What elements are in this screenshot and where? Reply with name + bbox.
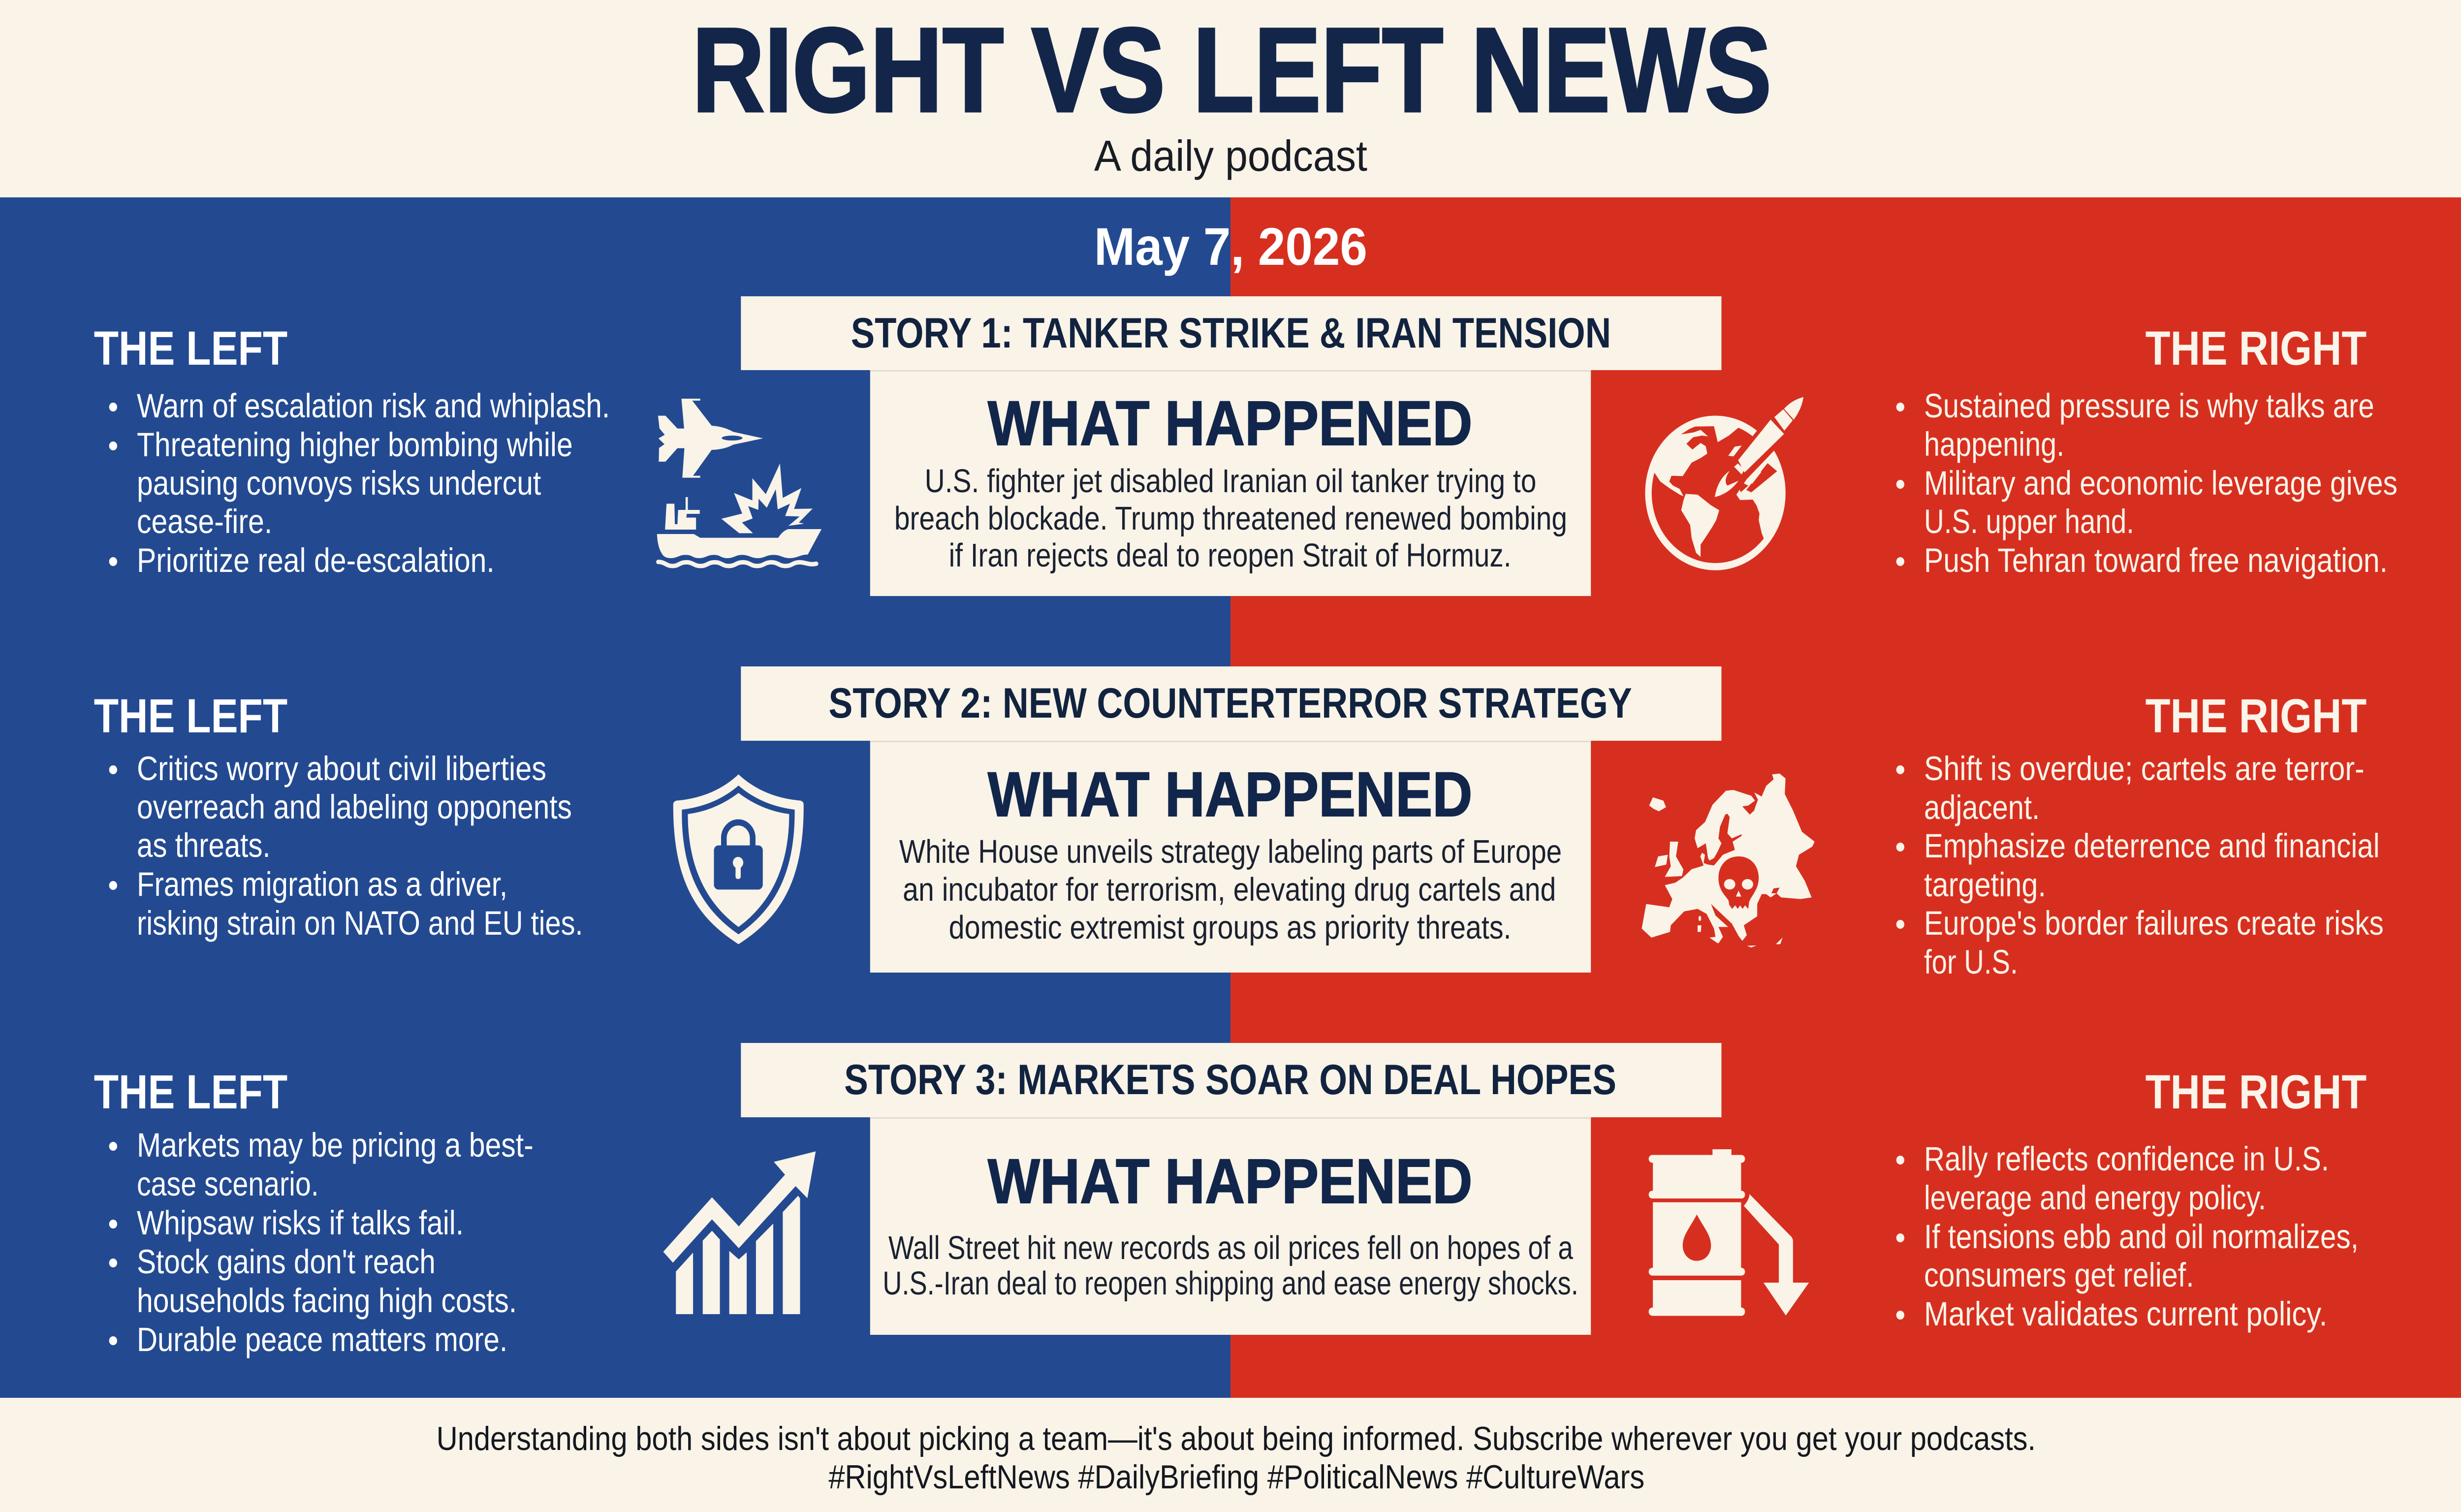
panel: story 3 centre [741,1043,1721,1335]
what happened text: breach blockade. Trump threatened renewed bombing [894,500,1567,537]
bullet list: for U.S. [1924,943,2018,981]
date: May 7, 2026 [1094,217,1367,276]
story 2 heading: STORY 2: NEW COUNTERTERROR STRATEGY [828,680,1632,727]
heading: THE RIGHT [2145,321,2366,375]
bullet list: Military and economic leverage gives [1924,464,2398,502]
bullet list: Critics worry about civil liberties [137,749,546,788]
heading: THE LEFT [94,321,287,375]
heading: THE RIGHT [2145,689,2366,743]
icon: rising market chart [663,1151,816,1314]
title: RIGHT VS LEFT NEWS [692,3,1771,137]
bullet list: consumers get relief. [1924,1256,2194,1294]
background band [0,197,2461,1398]
what happened text: U.S. fighter jet disabled Iranian oil tanker trying to [925,462,1536,500]
what happened text: Wall Street hit new records as oil prices fell on hopes of a [888,1229,1573,1266]
bullet list: Rally reflects confidence in U.S. [1924,1139,2329,1178]
bullet list: risking strain on NATO and EU ties. [137,904,583,942]
heading: THE RIGHT [2145,1065,2366,1119]
icon: globe and missile [1640,397,1803,570]
what happened text [894,462,1567,574]
bullet list: Whipsaw risks if talks fail. [137,1203,464,1242]
heading: THE LEFT [94,689,287,743]
what happened text: White House unveils strategy labeling parts of Europe [899,833,1562,870]
bullet list: Prioritize real de-escalation. [137,541,495,579]
what happened heading: WHAT HAPPENED [988,1146,1472,1216]
bullet list: If tensions ebb and oil normalizes, [1924,1217,2359,1256]
bullet list: U.S. upper hand. [1924,502,2134,540]
footer text [437,1419,2036,1496]
icon: shield with padlock [673,774,804,944]
icon: fighter jet and tanker explosion [657,399,821,566]
what happened text: U.S.-Iran deal to reopen shipping and ease energy shocks. [883,1264,1578,1302]
bullet list [1896,386,2398,579]
bullet list [109,1126,534,1358]
what happened text [883,1229,1578,1302]
bullet list [1896,1139,2359,1333]
bullet list: adjacent. [1924,788,2040,826]
bullet list: Durable peace matters more. [137,1320,507,1358]
bullet list: pausing convoys risks undercut [137,464,541,502]
icon: oil barrel with falling arrow [1649,1149,1809,1316]
heading: THE LEFT [94,1065,287,1119]
panel: the right, story 2 [1896,689,2384,981]
bullet list: households facing high costs. [137,1281,517,1320]
bullet list: happening. [1924,425,2064,463]
what happened heading: WHAT HAPPENED [988,759,1472,829]
panel: the left, story 1 [94,321,610,579]
panel: story 2 centre [741,666,1721,973]
what happened text: an incubator for terrorism, elevating drug cartels and [903,871,1556,908]
subtitle: A daily podcast [1094,131,1367,180]
panel: the left, story 2 [94,689,583,942]
bullet list: targeting. [1924,865,2046,904]
what happened text: if Iran rejects deal to reopen Strait of Hormuz. [949,536,1511,574]
what happened heading: WHAT HAPPENED [988,388,1472,458]
footer text: #RightVsLeftNews #DailyBriefing #PoliticalNews #CultureWars [828,1458,1644,1496]
bullet list: Emphasize deterrence and financial [1924,826,2380,865]
story 1 heading: STORY 1: TANKER STRIKE & IRAN TENSION [851,310,1611,357]
bullet list [1896,749,2384,981]
bullet list: Warn of escalation risk and whiplash. [137,386,610,425]
panel: the left, story 3 [94,1065,534,1358]
bullet list: Threatening higher bombing while [137,425,573,464]
footer text: Understanding both sides isn't about picking a team—it's about being informed. Subscribe wherever you get your podcasts. [437,1419,2036,1457]
bullet list: overreach and labeling opponents [137,788,572,826]
story 3 heading: STORY 3: MARKETS SOAR ON DEAL HOPES [844,1057,1616,1103]
what happened text [899,833,1562,946]
panel: the right, story 3 [1896,1065,2366,1333]
bullet list [109,386,610,579]
bullet list: cease-fire. [137,502,272,540]
bullet list: case scenario. [137,1165,319,1203]
icon: Europe map with skull [1641,774,1815,947]
bullet list: Europe's border failures create risks [1924,904,2384,942]
what happened text: domestic extremist groups as priority threats. [949,909,1511,946]
bullet list: Shift is overdue; cartels are terror- [1924,749,2365,788]
bullet list: as threats. [137,826,271,864]
bullet list [109,749,583,942]
bullet list: Stock gains don't reach [137,1242,436,1281]
bullet list: Push Tehran toward free navigation. [1924,541,2388,579]
bullet list: Frames migration as a driver, [137,865,507,903]
bullet list: Markets may be pricing a best- [137,1126,534,1164]
bullet list: leverage and energy policy. [1924,1178,2266,1217]
bullet list: Sustained pressure is why talks are [1924,386,2374,425]
bullet list: Market validates current policy. [1924,1294,2327,1333]
panel: story 1 centre [741,296,1721,596]
panel: the right, story 1 [1896,321,2398,579]
